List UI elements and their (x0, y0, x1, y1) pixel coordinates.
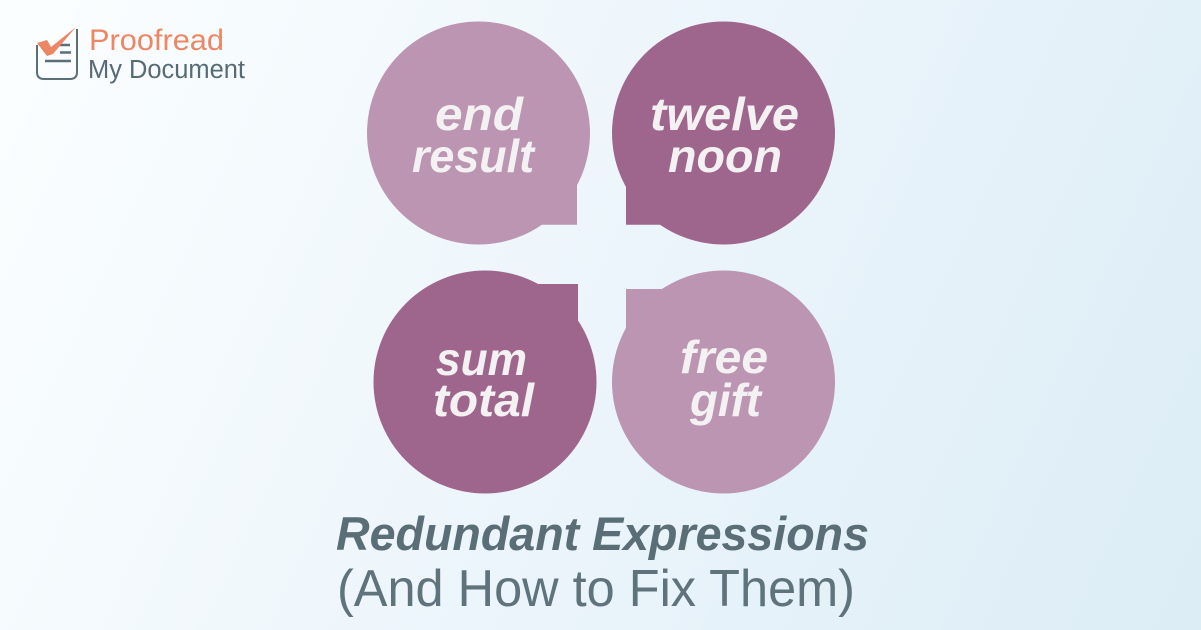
bubble text: end result: end (435, 88, 524, 140)
subtitle: (And How to Fix Them) (337, 560, 855, 618)
bubble text: twelve noon: noon (668, 130, 782, 182)
bubble text: twelve noon: twelve (650, 88, 799, 140)
logo wordmark: Proofread: Proofread (89, 24, 224, 57)
logo (37, 24, 245, 84)
bubble text: free gift: gift (689, 374, 763, 426)
logo wordmark: My Document: My Document (88, 56, 245, 84)
bubble: sum total (374, 270, 596, 494)
bubble text: free gift: free (680, 331, 768, 383)
bubble text: sum total: total (433, 374, 535, 426)
title: Redundant Expressions (336, 507, 869, 560)
bubble text: sum total: sum (436, 333, 527, 385)
bubble text: sum total (433, 333, 535, 426)
bubble: free gift (612, 270, 835, 494)
bubble text: end result (412, 88, 536, 182)
bubble: twelve noon (612, 22, 835, 244)
icon: document with check mark (37, 27, 77, 79)
bubble text: twelve noon (650, 88, 799, 182)
bubble text: end result: result (412, 130, 536, 182)
bubble text: free gift (680, 331, 768, 426)
bubble: end result (367, 22, 590, 244)
